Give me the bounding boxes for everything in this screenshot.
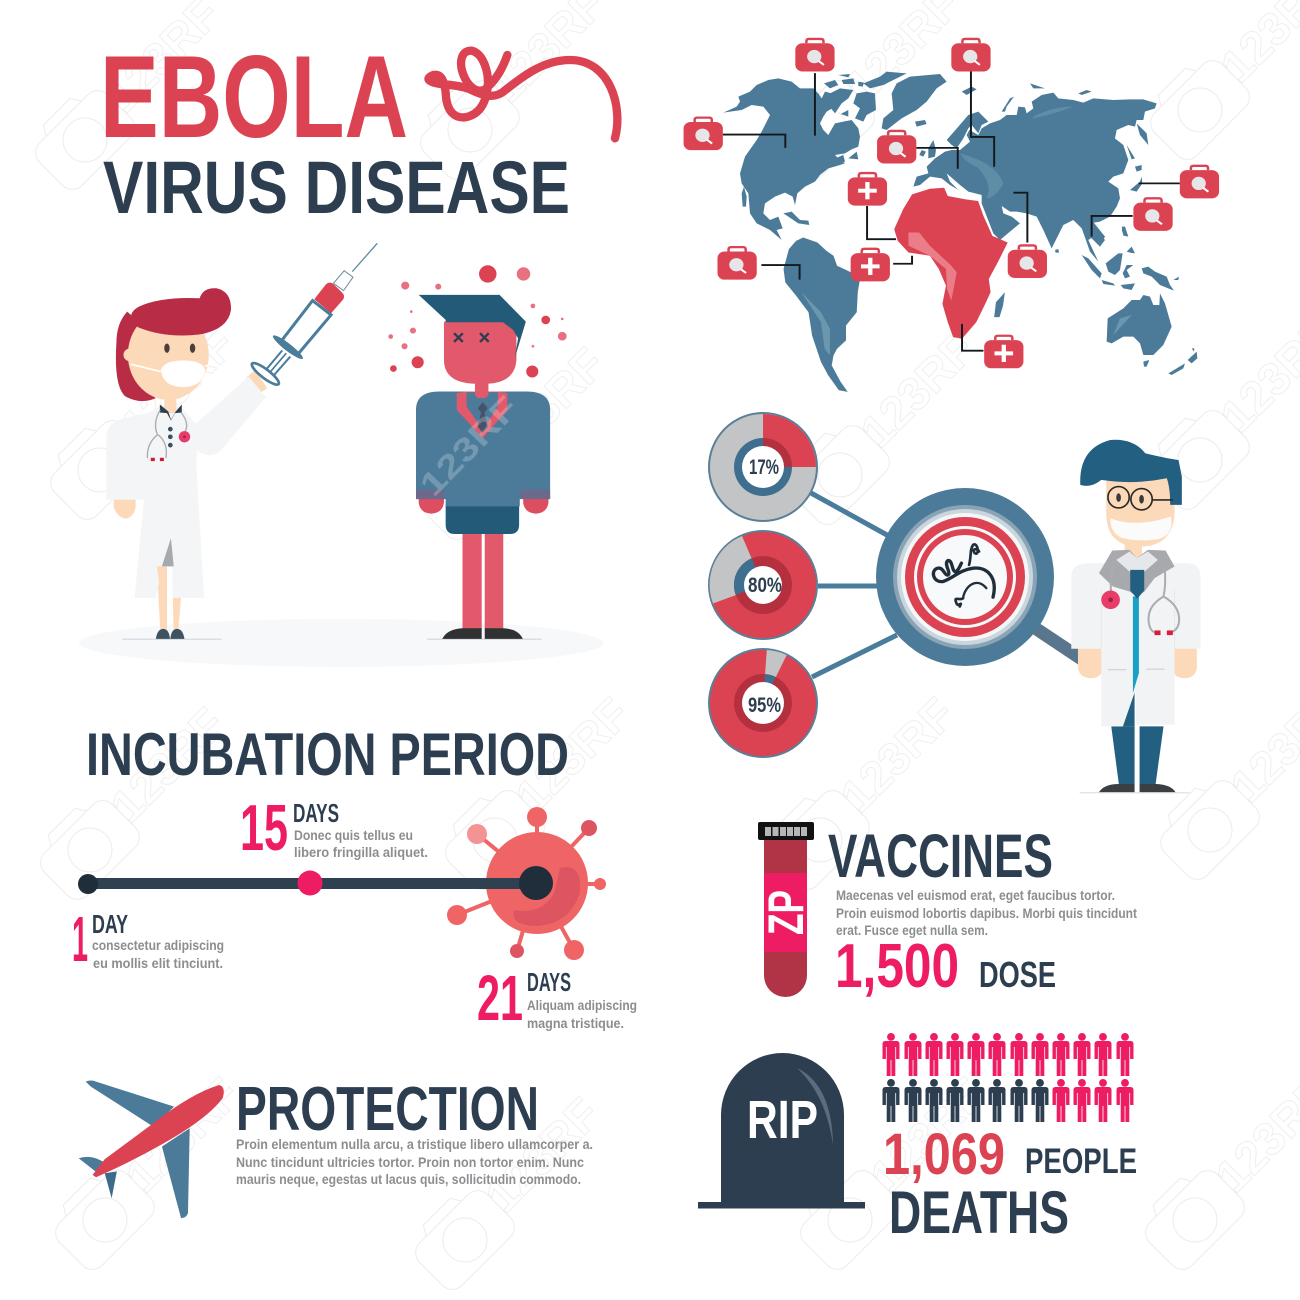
medkit markers [684, 39, 1219, 368]
connector lines [723, 71, 1180, 351]
milestone: 15 days: libero fringilla aliquet. [294, 844, 428, 860]
icon: airplane [79, 1080, 224, 1218]
body text: Proin elementum nulla arcu, a tristique libero ullamcorper a. [236, 1136, 593, 1152]
heading: VIRUS DISEASE: VIRUS DISEASE [103, 146, 570, 229]
icon: test tube [758, 822, 814, 997]
panel: diagnosis pies and magnifier [709, 413, 1200, 793]
heading: incubation period: INCUBATION PERIOD [86, 721, 569, 788]
panel: protection [79, 1075, 593, 1218]
stat: 1,069 people deaths: PEOPLE [1025, 1142, 1137, 1181]
panel: vaccines [758, 822, 1137, 1001]
pictogram: people [882, 1033, 1134, 1122]
milestone: 21 days: DAYS [527, 967, 571, 997]
milestone: 21 days: Aliquam adipiscing [527, 997, 637, 1013]
Africa highlighted [894, 188, 1008, 339]
milestone: 15 days: 15 [240, 791, 288, 864]
timeline: incubation days [72, 791, 637, 1034]
pie chart: 80% [709, 531, 817, 639]
stat: 1,069 people deaths [883, 1122, 1137, 1246]
milestone: 1 day: consectetur adipiscing [92, 937, 224, 953]
body text: Maecenas vel euismod erat, eget faucibus tortor. [836, 887, 1115, 903]
timeline bar [88, 878, 536, 889]
milestone: 21 days: 21 [477, 962, 523, 1034]
body text [836, 887, 1137, 938]
body text: erat. Fusce eget nulla sem. [836, 922, 988, 938]
stat: 1,500 dose: 1,500 [835, 932, 959, 1001]
continents [723, 72, 1197, 392]
female doctor [106, 288, 267, 639]
heading: vaccines: VACCINES [828, 822, 1053, 890]
milestone: 1 day [72, 903, 224, 975]
stat: 1,069 people deaths: 1,069 [883, 1122, 1005, 1187]
infected man [388, 265, 567, 639]
icon: magnifying glass with virus [876, 488, 1092, 666]
body text: Nunc tincidunt ultricies tortor. Proin non tortor enim. Nunc [236, 1154, 584, 1170]
milestone: 1 day: 1 [72, 903, 88, 975]
milestone: 15 days: Donec quis tellus eu [294, 827, 413, 843]
icon: test tube: ZP [758, 890, 814, 935]
male doctor [1071, 440, 1200, 793]
icon: tombstone: RIP [747, 1090, 818, 1150]
Eurasia [913, 83, 1157, 253]
milestone: 1 day: DAY [92, 909, 128, 939]
heading: EBOLA: EBOLA [100, 31, 408, 162]
icon: tombstone [698, 1053, 865, 1208]
pie chart: 80%: 80% [748, 574, 782, 597]
milestone: 21 days [477, 962, 637, 1034]
body text: mauris neque, egestas ut lacus quis, sollicitudin commodo. [236, 1171, 581, 1187]
Southeast Asia and Oceania [1080, 220, 1197, 375]
pie chart: 95% [709, 649, 817, 757]
milestone: 15 days: DAYS [293, 798, 339, 828]
illustration: female doctor and infected man [79, 243, 603, 667]
heading: protection: PROTECTION [236, 1075, 539, 1144]
title: EBOLA virus disease [100, 31, 617, 229]
panel: deaths [698, 1033, 1137, 1246]
Madagascar [994, 292, 1005, 317]
body text [236, 1136, 593, 1187]
body text: Proin euismod lobortis dapibus. Morbi quis tincidunt [836, 905, 1137, 921]
ground shadow [79, 619, 603, 667]
South America [784, 238, 860, 392]
connector bars [811, 493, 897, 677]
pie chart: 17%: 17% [749, 456, 779, 479]
pie chart: 17% [709, 413, 817, 521]
milestone: 21 days: magna tristique. [527, 1015, 624, 1031]
milestone: 1 day: eu mollis elit tinciunt. [93, 955, 223, 971]
stat: 1,069 people deaths: DEATHS [889, 1179, 1069, 1246]
infected man: 123RF [412, 389, 526, 503]
icon: virus cell [447, 807, 606, 960]
pie chart: 95%: 95% [748, 694, 781, 717]
icon: ebola virus squiggle [429, 51, 617, 138]
Americas north, Greenland [723, 72, 947, 240]
world map with medical kit markers [684, 39, 1219, 392]
milestone: 15 days [240, 791, 428, 864]
virus spots [388, 265, 567, 378]
icon: syringe [249, 243, 377, 388]
stat: 1,500 dose: DOSE [979, 954, 1056, 995]
